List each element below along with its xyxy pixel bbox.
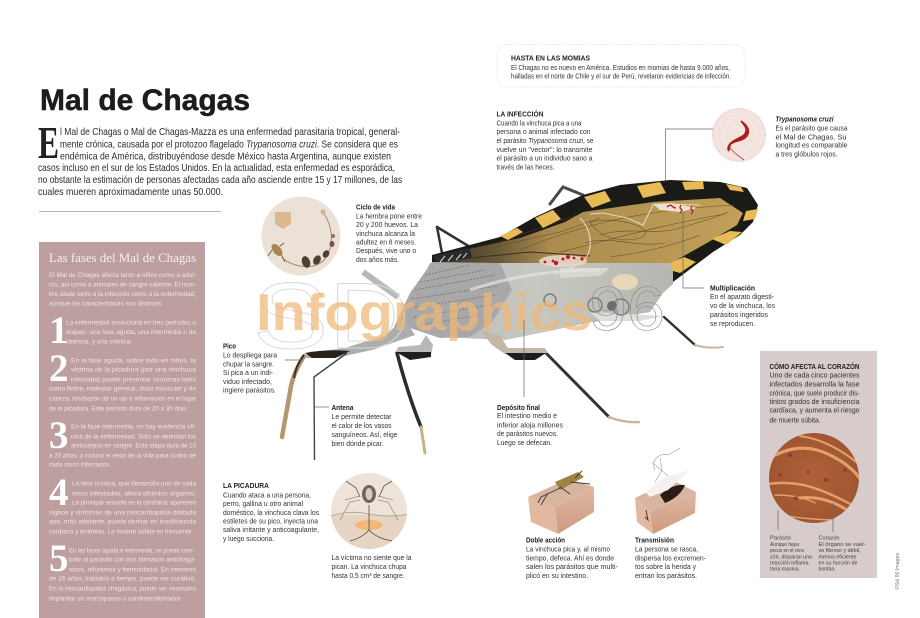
panel text: infectados desarrolla la fase: [770, 382, 860, 388]
panel text: crónica, que suele producir dis-: [770, 390, 860, 398]
phase 4: La fase crónica, que desarrolla uno de cada: [72, 480, 196, 488]
lower abdomen: [400, 263, 673, 340]
intro text: l Mal de Chagas o Mal de Chagas-Mazza es una enfermedad parasitaria tropical, general-: [60, 127, 400, 138]
phase 4: 4: [49, 471, 68, 514]
text: la infección: través de las heces.: [496, 164, 555, 172]
text: depósito final: El intestino medio e: [497, 413, 557, 420]
text: trypanosoma cruzi: el Mal de Chagas. Su: [776, 134, 847, 142]
front leg: [363, 272, 398, 297]
panel text: cardíaca, y aumenta el riesgo: [770, 408, 860, 414]
panel intro: bre alude tanto a la infección como a la enfermedad,: [49, 291, 196, 298]
title: Mal de Chagas: [40, 84, 250, 117]
panel intro: [49, 272, 196, 308]
text: ciclo de vida: 20 y 200 huevos. La: [356, 222, 418, 229]
text: depósito final: [497, 405, 564, 447]
caption: parásito: [770, 536, 812, 572]
phase 5: sicos, nifurtimox y benznidazol. En menores: [69, 566, 196, 574]
callout: hasta en las momias: HASTA EN LAS MOMIAS: [511, 56, 590, 62]
drop cap: E: [38, 118, 59, 168]
text: depósito final: inferior aloja millones: [497, 422, 564, 430]
phase 3: cada cinco infectados.: [49, 462, 111, 468]
caption: parásito: pocos en el cora-: [770, 548, 805, 554]
text: ciclo de vida: vinchuca alcanza la: [356, 231, 415, 238]
caption: corazón: Corazón: [818, 536, 840, 542]
phase 4: cardíaca y arritmias. La muerte súbita es frecuente.: [49, 528, 193, 536]
phase 5: implantar un marcapasos o cardiodesfibrilador.: [49, 596, 182, 602]
phase 5: de 16 años, tratados a tiempo, puede ser curativo.: [49, 576, 196, 582]
wing outer band: [432, 180, 758, 282]
watermark: Infographics: [256, 284, 592, 342]
text: transmisión: dispersa los excremen-: [635, 556, 706, 562]
text: trypanosoma cruzi: Trypanosoma cruzi: [776, 116, 834, 124]
text: multiplicación: se reproducen.: [710, 321, 755, 328]
text: la infección: Cuando la vinchuca pica a una: [496, 120, 582, 128]
text: la infección: el parásito Trypanosoma cruzi, se: [496, 138, 594, 145]
text: bite caption: pican. La vinchuca chupa: [332, 564, 407, 571]
wing base stripes: [433, 249, 472, 263]
leader: antena: [315, 406, 329, 408]
text: pico: Pico: [223, 344, 236, 350]
callout: hasta en las momias: El Chagas no es nuevo en América. Estudios en momias de hasta 9.000 años,: [511, 65, 730, 72]
panel intro: El Mal de Chagas afecta tanto a niños como a adul-: [49, 272, 196, 279]
panel intro: aunque las características son distintas.: [49, 300, 163, 308]
text: transmisión: tos sobre la herida y: [635, 564, 697, 571]
phase 4: cinco infectados, altera distintos órganos.: [72, 490, 196, 498]
wing membrane: [440, 198, 743, 263]
thorax: [388, 262, 512, 340]
phase 5: En las fases aguda e intermedia, se puede com-: [69, 548, 194, 554]
text: ciclo de vida: adultez en 8 meses.: [356, 240, 416, 246]
text: depósito final: Depósito final: [497, 405, 540, 412]
phase 5: 5: [49, 537, 68, 580]
text: ciclo de vida: La hembra pone entre: [356, 214, 422, 220]
text: trypanosoma cruzi: Es el parásito que causa: [776, 126, 848, 132]
text: depósito final: de parásitos nuevos.: [497, 431, 558, 438]
text: antena: bien dónde picar.: [332, 441, 384, 448]
text: la picadura: LA PICADURA: [223, 483, 269, 490]
phase 1: 1: [49, 309, 68, 352]
mouthpart: pico: [282, 356, 304, 437]
intro text: no obstante la estimación de personas afectadas cada año asciende entre 15 y 17 millones, de las: [38, 175, 402, 186]
icon: heart tissue circle: [768, 433, 865, 523]
text: la infección: persona o animal infectado con: [496, 129, 591, 136]
text: transmisión: [635, 538, 706, 580]
caption: corazón: ve fibroso y débil,: [818, 548, 860, 554]
text: la picadura: doméstico, la vinchuca clava los: [223, 510, 320, 517]
phase 2: 2: [49, 347, 68, 390]
text: transmisión: Transmisión: [635, 538, 674, 544]
phase 1: [49, 309, 196, 352]
leader: multiplicación: [683, 212, 704, 288]
watermark: 96: [589, 275, 665, 344]
text: doble acción: Doble acción: [526, 538, 565, 544]
phase 2: [49, 347, 197, 412]
watermark: SD: [253, 263, 410, 368]
text: pico: viduo infectado,: [223, 379, 272, 386]
intro text: casos incluso en el sur de los Estados Unidos. En la actualidad, esta enfermedad es esporádica,: [38, 163, 395, 174]
phase 3: 3: [49, 414, 68, 457]
text: pico: chupar la sangre.: [223, 362, 274, 368]
text: la picadura: [223, 483, 320, 543]
intro text: [38, 118, 402, 198]
phase 4: [49, 471, 196, 536]
phase 5: En la miocardiopatía chagásica, puede ser necesario: [49, 586, 196, 592]
leader: depósito final: [523, 320, 525, 397]
panel text: [770, 372, 860, 424]
text: ciclo de vida: [356, 204, 422, 264]
icon: trypanosoma cruzi circle: [712, 108, 766, 162]
text: la picadura: perro, gallina u otro animal: [223, 501, 303, 508]
panel: las fases del Mal de Chagas: [39, 242, 205, 618]
text: doble acción: tiempo, defeca. Ahí es donde: [526, 556, 614, 562]
text: doble acción: salen los parásitos que multi-: [526, 564, 618, 571]
text: multiplicación: Multiplicación: [710, 286, 755, 292]
text: trypanosoma cruzi: a tres glóbulos rojos.: [776, 152, 838, 158]
icon: life cycle circle: [262, 196, 340, 276]
icon: skin block with insect: [528, 471, 594, 534]
text: ciclo de vida: dos años más.: [356, 257, 399, 264]
text: multiplicación: parásitos ingeridos: [710, 312, 769, 319]
text: la infección: LA INFECCIÓN: [496, 110, 544, 118]
text: multiplicación: vo de la vinchuca, los: [710, 303, 776, 310]
panel: cómo afecta al corazón: [760, 351, 877, 578]
text: bite caption: La víctima no siente que la: [332, 555, 412, 562]
panel intro: tos, así como a animales de sangre caliente. El nom-: [49, 282, 196, 288]
text: doble acción: La vinchuca pica y, al mismo: [526, 546, 610, 554]
panel heading: Las fases del Mal de Chagas: [49, 250, 196, 265]
text: trypanosoma cruzi: [776, 116, 848, 158]
leader: pico: [285, 359, 303, 361]
text: pico: Si pica a un indi-: [223, 370, 273, 377]
text: multiplicación: En el aparato digesti-: [710, 294, 774, 301]
wing veins: [480, 205, 735, 257]
text: ciclo de vida: Después, vive uno o: [356, 248, 416, 255]
phase 3: nica de la enfermedad. Sólo se detectan los: [71, 434, 196, 440]
phase 2: infectada) puede presentar síntomas tales: [71, 376, 196, 384]
text: la picadura: saliva irritante y anticoagulante,: [223, 527, 319, 534]
panel heading: CÓMO AFECTA AL CORAZÓN: [770, 362, 860, 371]
phase 1: latencia, y una crónica.: [66, 338, 132, 346]
caption: parásito: toria masiva.: [770, 566, 800, 572]
intro text: endémica de América, distribuyéndose desde México hasta Argentina, aunque existen: [60, 152, 391, 162]
watermark: [253, 263, 665, 368]
caption: parásito: zón, disparan una: [770, 554, 812, 560]
caption: parásito: Aunque haya: [770, 542, 799, 548]
phase 3: a 20 años, o incluso el resto de la vida para cuatro de: [49, 452, 196, 460]
phase 2: En la fase aguda, sobre todo en niños, la: [71, 358, 196, 364]
wing parasites: [539, 203, 697, 267]
text: pico: Lo despliega para: [223, 352, 277, 360]
credit: ©Sol 90 Images: [894, 552, 901, 590]
illustration: vinchuca insect: [282, 180, 758, 460]
panel text: tintos grados de insuficiencia: [770, 399, 860, 406]
leaders: parásito, corazón: [778, 503, 833, 532]
text: trypanosoma cruzi: longitud es comparable: [776, 142, 848, 150]
text: depósito final: Luego se defecan.: [497, 440, 552, 447]
text: la picadura: Cuando ataca a una persona,: [223, 492, 311, 500]
panel text: Uno de cada cinco pacientes: [770, 372, 860, 380]
text: antena: Le permite detectar: [332, 414, 392, 421]
text: la infección: vuelve un "vector": lo transmite: [496, 147, 593, 154]
text: la picadura: y luego succiona.: [223, 536, 274, 543]
text: bite caption: hasta 0,5 cm³ de sangre.: [332, 573, 405, 580]
caption: parásito: reacción inflama-: [770, 560, 810, 566]
text: ciclo de vida: Ciclo de vida: [356, 204, 395, 212]
text: pico: ingiere parásitos.: [223, 388, 276, 394]
text: la infección: [496, 110, 594, 172]
panel text: de muerte súbita.: [770, 418, 821, 424]
text: pico: [223, 344, 277, 394]
text: doble acción: [526, 538, 618, 580]
phase 2: víctima de la picadura (por una vinchuca: [71, 366, 196, 374]
text: la infección: el parásito a un individuo sano a: [496, 156, 593, 162]
intro text: cuales mueren aproximadamente unas 50.000.: [38, 187, 223, 198]
phase 4: que, más adelante, puede derivar en insuficiencia: [49, 518, 196, 526]
text: antena: el calor de los vasos: [332, 423, 392, 430]
icon: skin block with scratching hand: [635, 448, 696, 534]
caption: corazón: [818, 536, 866, 572]
text: transmisión: entran los parásitos.: [635, 573, 697, 580]
caption: parásito: Parásito: [770, 536, 791, 542]
wing yellow stripes: [500, 181, 758, 273]
phase 2: como fiebre, malestar general, dolor muscular y de: [49, 386, 196, 392]
caption: corazón: El órgano se vuel-: [818, 542, 866, 548]
legs: [397, 187, 723, 453]
text: antena: sanguíneos. Así, elige: [332, 432, 398, 439]
callout: hasta en las momias: [497, 44, 745, 87]
phase 2: de la picadura. Este período dura de 20 a 30 días.: [49, 406, 188, 412]
text: antena: [332, 405, 398, 448]
caption: corazón: en su función de: [818, 560, 858, 566]
caption: corazón: bomba.: [818, 566, 836, 572]
text: transmisión: La persona se rasca,: [635, 546, 698, 554]
phase 5: batir al parásito con dos fármacos antichagá-: [69, 556, 196, 564]
phase 3: anticuerpos en sangre. Esta etapa dura de 10: [71, 442, 196, 450]
phase 4: La principal secuela es la cardíaca; aparecen: [72, 500, 196, 506]
phase 2: cabeza, hinchazón de un ojo e inflamación en el lugar: [49, 396, 197, 402]
head: [306, 318, 415, 358]
phase 1: La enfermedad evoluciona en tres períodos o: [66, 320, 196, 326]
phase 1: etapas: una fase aguda, una intermedia o de: [66, 329, 196, 336]
intro text: mente crónica, causada por el protozoo flagelado Trypanosoma cruzi. Se considera que es: [60, 140, 398, 150]
icon: bite circle: [331, 473, 407, 549]
phase 5: [49, 537, 196, 602]
antenna: [314, 353, 347, 460]
text: antena: Antena: [332, 405, 354, 412]
phase 4: signos y síntomas de una miocardiopatía dilatada: [49, 510, 196, 516]
text: la picadura: estiletes de su pico, inyecta una: [223, 518, 318, 526]
text: doble acción: plicó en su intestino.: [526, 573, 588, 580]
text: bite caption: [332, 555, 412, 580]
phase 3: [49, 414, 196, 468]
caption: corazón: menos eficiente: [818, 554, 857, 560]
callout: hasta en las momias: halladas en el norte de Chile y el sur de Perú, revelaron evidencias de infección.: [511, 74, 731, 80]
phase 3: En la fase intermedia, no hay evidencia clí-: [71, 424, 196, 430]
text: multiplicación: [710, 286, 776, 328]
